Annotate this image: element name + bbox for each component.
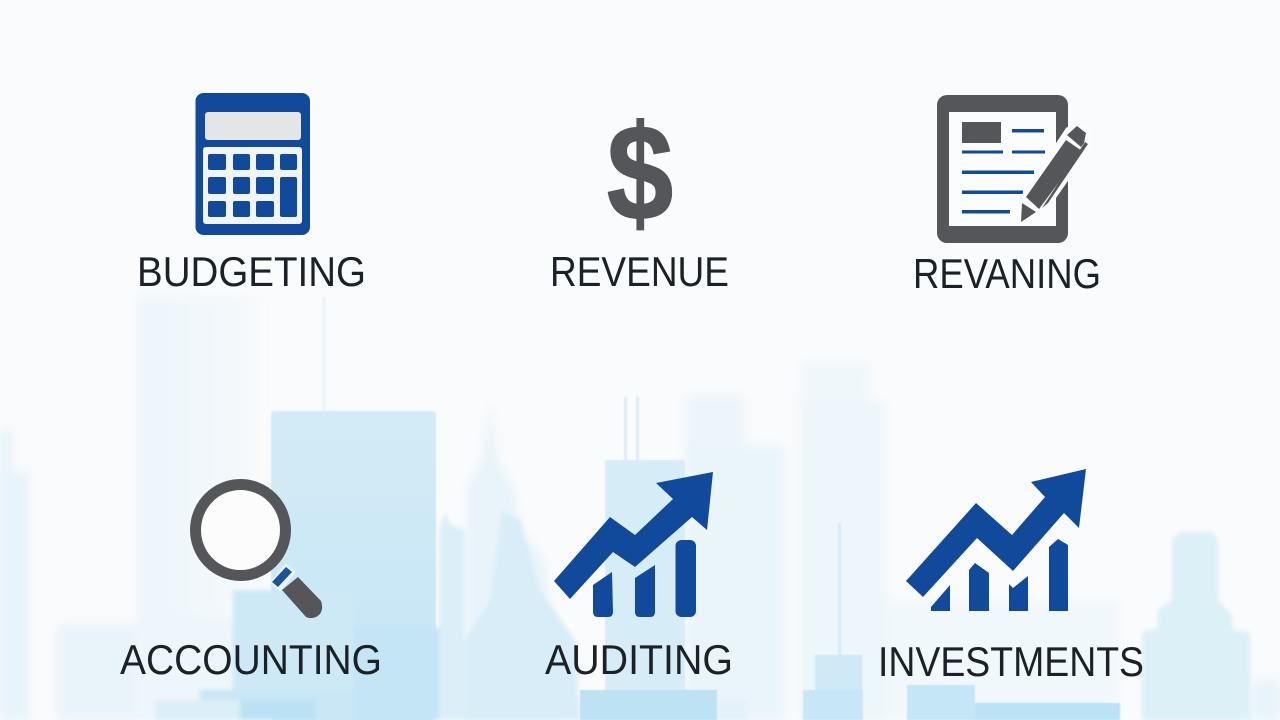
label: auditing: AUDITING (545, 636, 733, 683)
icon: growth arrow with square bars (906, 469, 1086, 611)
item: accounting (120, 484, 382, 683)
item: investments (878, 469, 1144, 685)
label: accounting: ACCOUNTING (120, 636, 382, 683)
label: revenue: REVENUE (550, 248, 729, 295)
label: investments: INVESTMENTS (878, 638, 1144, 685)
label: budgeting: BUDGETING (137, 248, 366, 295)
icon: growth arrow with rounded bars (554, 472, 713, 617)
item: revenue (550, 97, 729, 295)
label: revaning: REVANING (913, 250, 1101, 297)
city skyline background (0, 295, 1280, 720)
item: budgeting (137, 93, 366, 295)
item: revaning (913, 95, 1101, 297)
icon: dollar sign: $ (607, 97, 673, 249)
item: auditing (545, 472, 733, 683)
icon: document with pencil (937, 95, 1092, 243)
icon: magnifying glass (196, 484, 322, 618)
icon: calculator (196, 93, 310, 235)
